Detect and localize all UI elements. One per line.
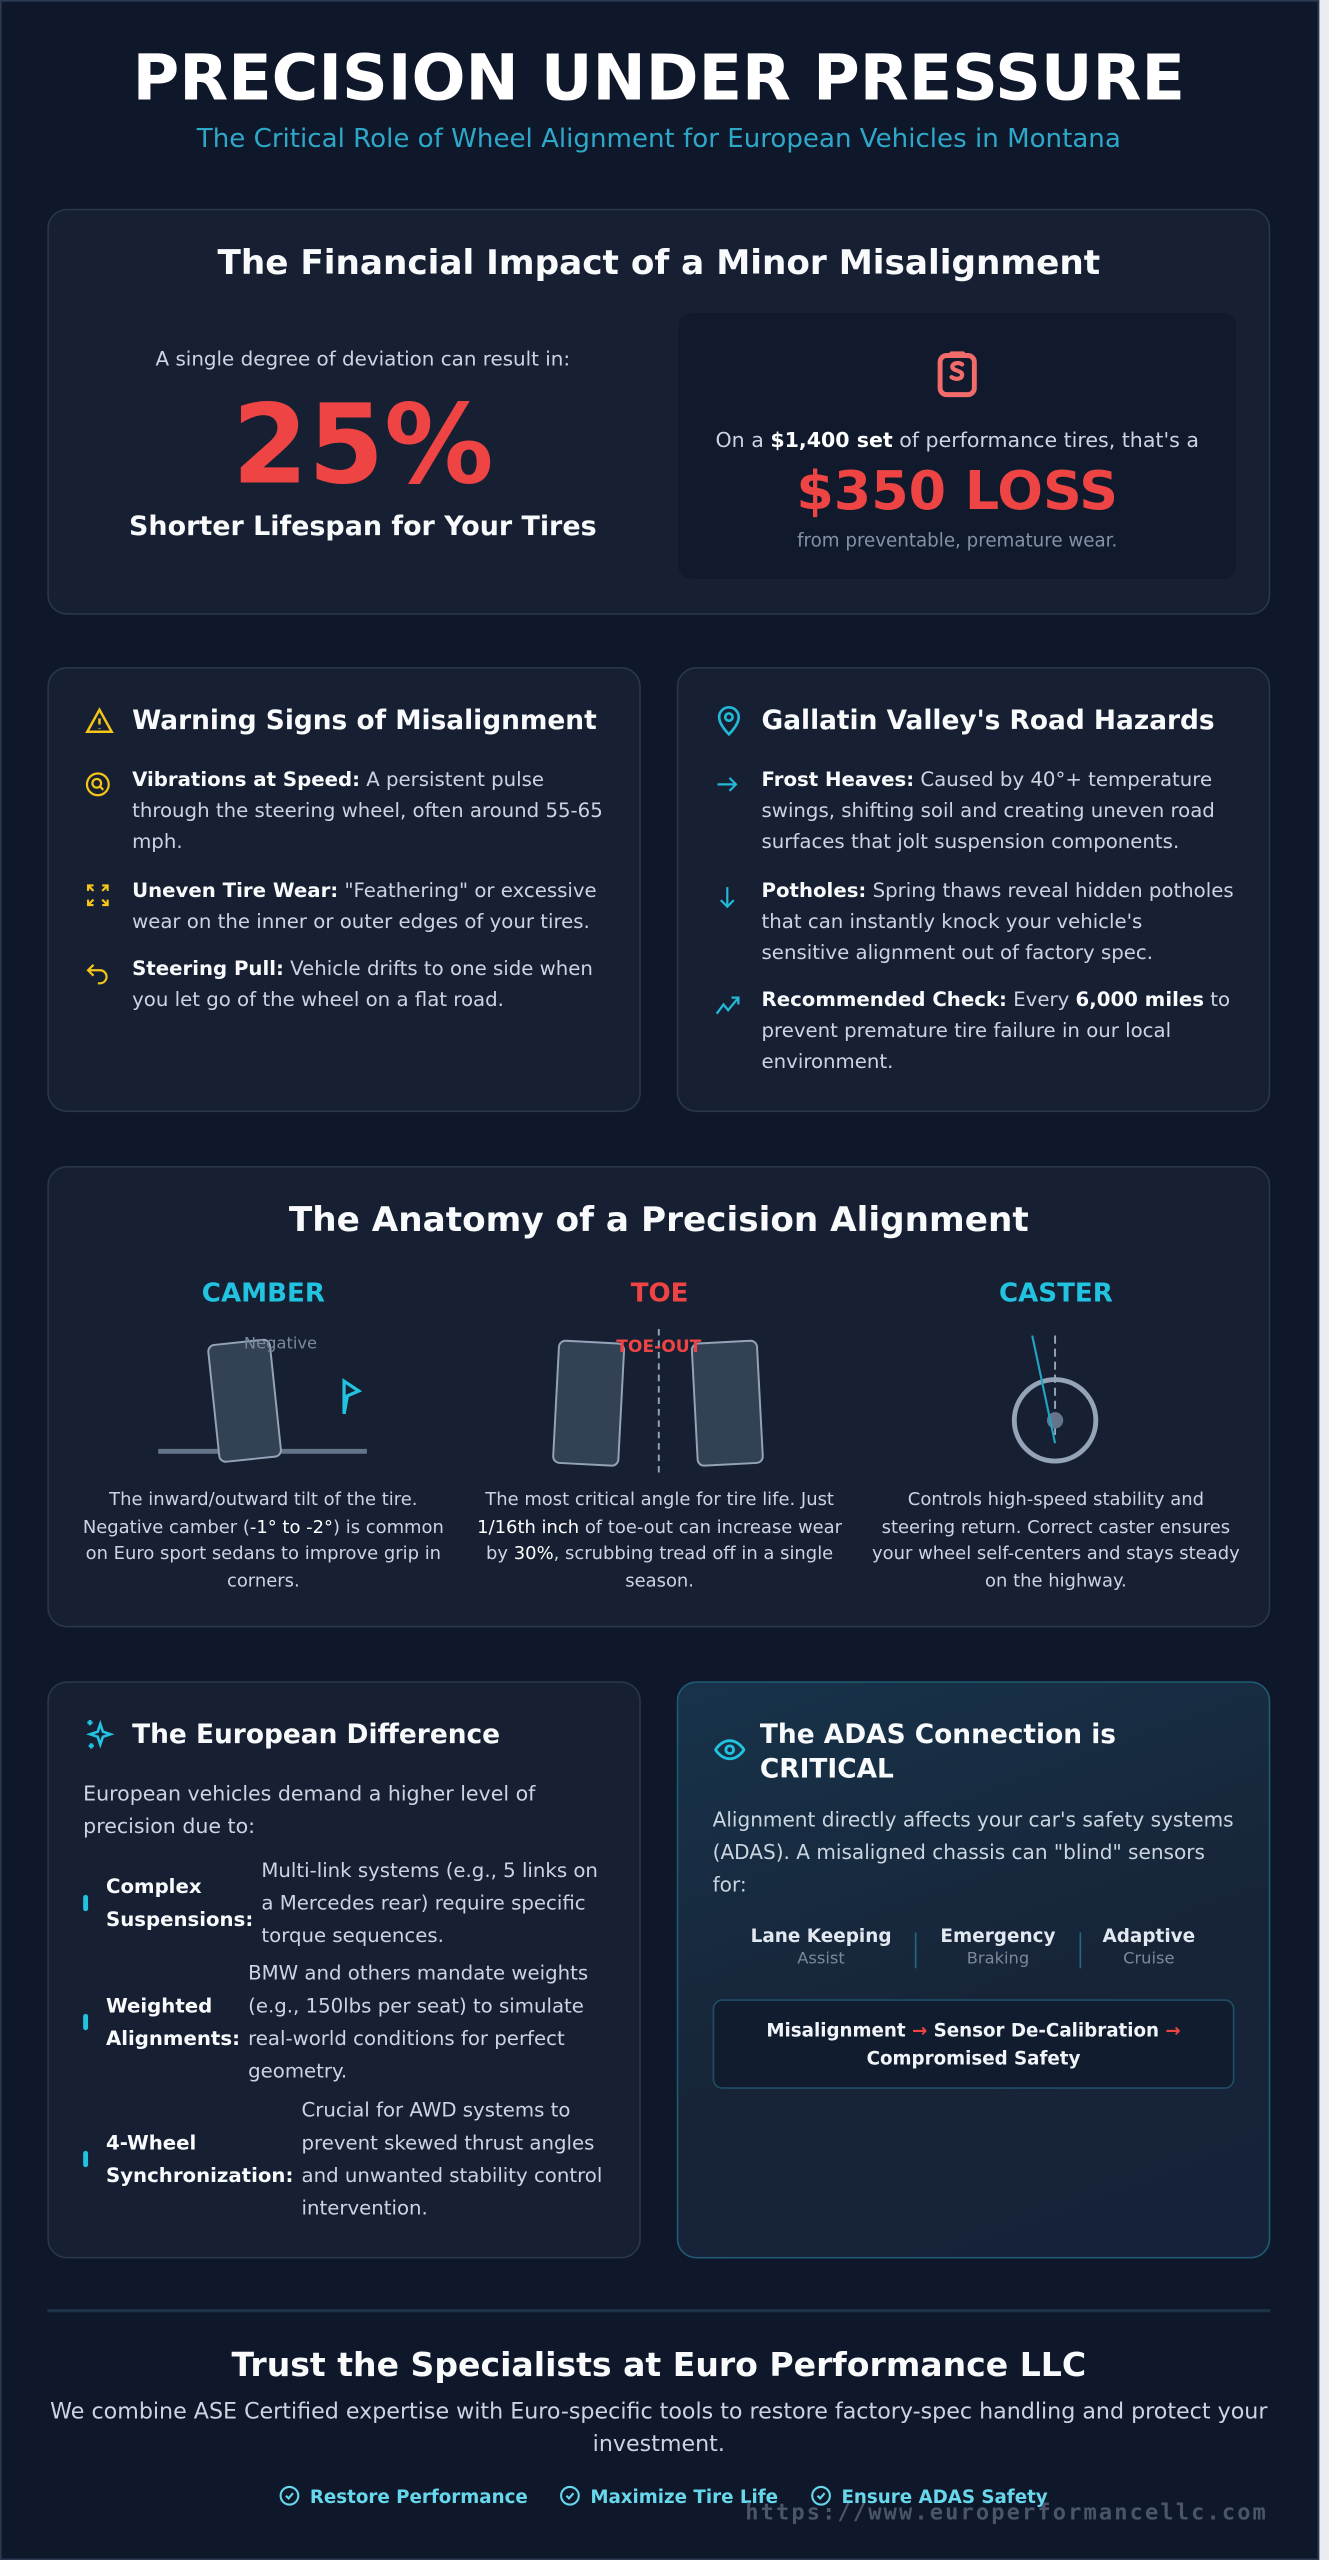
subtitle: The Critical Role of Wheel Alignment for European Vehicles in Montana xyxy=(197,122,1121,153)
list: benefits xyxy=(280,2486,1048,2508)
panel: anatomy xyxy=(47,1166,1270,1627)
list: ADAS systems xyxy=(751,1926,1195,1968)
item: complex suspensions: Multi-link systems (e.g., 5 links on a Mercedes rear) require specific torque sequences. xyxy=(261,1859,598,1947)
item: vibrations: Vibrations at Speed: A persistent pulse through the steering wheel, often around 55-65 mph. xyxy=(132,768,603,853)
item: 4-wheel sync: Synchronization: xyxy=(106,2164,293,2187)
callout: $350 loss: from preventable, premature wear. xyxy=(797,530,1117,551)
benefit: restore performance: Restore Performance xyxy=(310,2487,528,2508)
column: caster: Controls high-speed stability and steering return. Correct caster ensures your wheel self-centers and stays steady on the highway. xyxy=(872,1489,1240,1591)
diagram: camber xyxy=(158,1334,367,1463)
heading: warning signs: Warning Signs of Misalignment xyxy=(132,704,597,735)
column: camber: The inward/outward tilt of the tire. Negative camber (-1° to -2°) is common on Euro sport sedans to improve grip in corners. xyxy=(83,1489,444,1591)
icon: sparkles xyxy=(86,1720,114,1748)
stat: 25%: Shorter Lifespan for Your Tires xyxy=(129,510,597,541)
diagram: toe: TOE-OUT xyxy=(616,1337,702,1357)
list: ADAS systems: Adaptive xyxy=(1102,1926,1195,1947)
callout: $350 loss: $350 LOSS xyxy=(796,458,1118,522)
panel: european difference xyxy=(47,1681,641,2259)
list: ADAS systems: Emergency xyxy=(940,1926,1056,1947)
list: ADAS systems: Braking xyxy=(967,1950,1029,1968)
diagram: camber: Negative xyxy=(244,1334,317,1353)
callout: $350 loss xyxy=(678,313,1236,579)
panel: ADAS connection xyxy=(677,1681,1270,2259)
callout: chain: Compromised Safety xyxy=(867,2048,1080,2069)
item: frost heaves: Frost Heaves: Caused by 40°+ temperature swings, shifting soil and creating uneven road surfaces that jolt suspension components. xyxy=(762,768,1215,853)
item: uneven wear: Uneven Tire Wear: "Feathering" or excessive wear on the inner or outer edges of your tires. xyxy=(132,879,597,933)
heading: european difference: The European Difference xyxy=(132,1719,500,1750)
column: caster: CASTER xyxy=(999,1277,1113,1308)
callout: chain xyxy=(713,1999,1234,2089)
list: ADAS systems: Assist xyxy=(797,1950,845,1968)
benefit: maximize tire life: Maximize Tire Life xyxy=(590,2487,778,2508)
column: caster xyxy=(872,1277,1240,1591)
heading: ADAS: The ADAS Connection is CRITICAL xyxy=(760,1719,1116,1784)
heading: anatomy: The Anatomy of a Precision Alignment xyxy=(289,1200,1029,1239)
text: intro: European vehicles demand a higher level of precision due to: xyxy=(83,1781,535,1838)
column: camber: CAMBER xyxy=(202,1277,325,1308)
item: recommended check: Recommended Check: Every 6,000 miles to prevent premature tire failure in our local environment. xyxy=(762,988,1230,1073)
icon: warning triangle xyxy=(85,707,114,733)
callout: chain: Misalignment → Sensor De-Calibration → xyxy=(766,2020,1181,2042)
column: toe: The most critical angle for tire life. Just 1/16th inch of toe-out can increase wear by 30%, scrubbing tread off in a single season. xyxy=(477,1489,842,1591)
benefit: ensure ADAS safety: Ensure ADAS Safety xyxy=(841,2487,1048,2508)
item: steering pull: Steering Pull: Vehicle drifts to one side when you let go of the wheel on a flat road. xyxy=(132,957,593,1011)
panel: road hazards xyxy=(677,667,1270,1112)
title: PRECISION UNDER PRESSURE xyxy=(133,42,1185,116)
diagram: caster xyxy=(1012,1335,1098,1464)
item: complex suspensions: Complex xyxy=(106,1875,202,1898)
item: weighted alignments: Weighted xyxy=(106,1994,212,2017)
icon: eye xyxy=(714,1739,746,1760)
diagram: toe xyxy=(552,1329,764,1472)
stat: 25%: 25% xyxy=(232,382,494,509)
icon: map pin xyxy=(718,706,740,736)
panel: warning signs xyxy=(47,667,641,1112)
heading: trust: Trust the Specialists at Euro Performance LLC xyxy=(231,2345,1086,2384)
heading: road hazards: Gallatin Valley's Road Hazards xyxy=(762,704,1215,735)
item: 4-wheel sync xyxy=(83,2099,602,2219)
list: ADAS systems: Cruise xyxy=(1123,1950,1175,1968)
text: trust body: We combine ASE Certified expertise with Euro-specific tools to restore factory-spec handling and protect your investment. xyxy=(50,2399,1267,2457)
stat: 25%: A single degree of deviation can result in: xyxy=(156,347,570,370)
item: potholes xyxy=(720,879,1234,964)
item: 4-wheel sync: 4-Wheel xyxy=(106,2131,196,2154)
column: toe xyxy=(477,1277,842,1591)
item: complex suspensions: Suspensions: xyxy=(106,1908,253,1931)
stat: 25% xyxy=(129,347,597,541)
item: weighted alignments: Alignments: xyxy=(106,2027,240,2050)
icon: dollar tag xyxy=(938,351,977,398)
callout: $350 loss: On a $1,400 set of performance tires, that's a xyxy=(715,427,1199,452)
text: ADAS intro: Alignment directly affects your car's safety systems (ADAS). A misaligned chassis can "blind" sensors for: xyxy=(713,1808,1234,1897)
list: ADAS systems: Lane Keeping xyxy=(751,1926,892,1947)
column: camber xyxy=(83,1277,444,1591)
item: potholes: Potholes: Spring thaws reveal hidden potholes that can instantly knock your vehicle's xyxy=(762,879,1234,933)
heading: financial impact: The Financial Impact of a Minor Misalignment xyxy=(217,243,1100,282)
item: 4-wheel sync: Crucial for AWD systems to prevent skewed thrust angles and unwanted stability control intervention. xyxy=(302,2099,602,2219)
panel: financial impact xyxy=(47,209,1270,615)
item: complex suspensions xyxy=(83,1859,598,1947)
watermark url: https://www.europerformancellc.com xyxy=(745,2500,1268,2526)
item: weighted alignments xyxy=(83,1962,588,2082)
item: weighted alignments: BMW and others mandate weights (e.g., 150lbs per seat) to simulate real-world conditions for perfect geometry. xyxy=(248,1962,588,2082)
column: toe: TOE xyxy=(631,1277,689,1308)
item: potholes: sensitive alignment out of factory spec. xyxy=(762,941,1153,964)
